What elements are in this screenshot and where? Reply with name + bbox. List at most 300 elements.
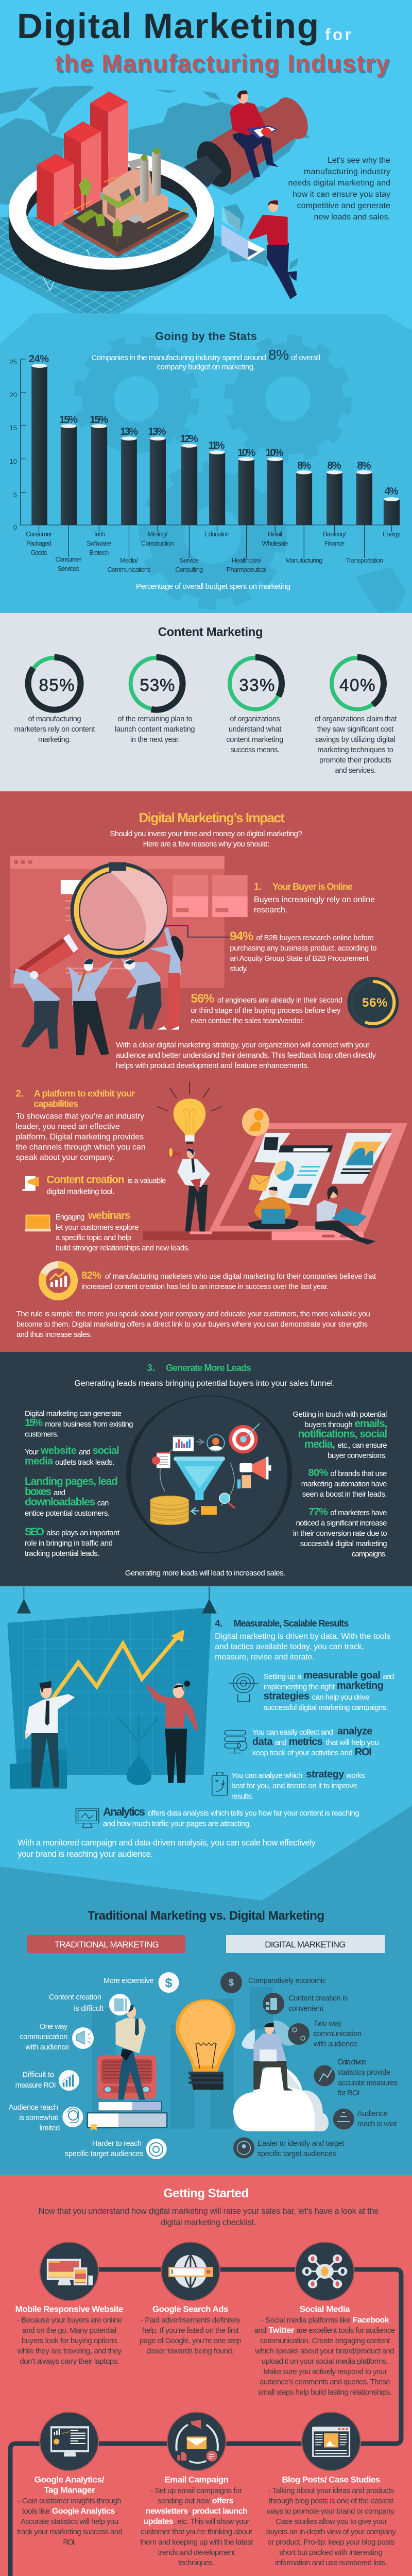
82 percent text and rule: and thus increase sales. [16, 1331, 92, 1339]
background gears [78, 340, 407, 613]
82 percent text and rule: become to them. Digital marketing offers a direct link to your buyers where you can demonstrate your strengths [16, 1320, 368, 1329]
checklist row 1: while they are traveling, and they [17, 2347, 122, 2355]
right column: notifications, social [298, 1428, 387, 1440]
left column: Your [25, 1448, 39, 1456]
traditional column labels: measure ROI [15, 2081, 56, 2090]
stats heading and captions: of overall [291, 353, 320, 362]
donut percentages: 53% [140, 675, 175, 694]
checklist row 2: sending out new [158, 2497, 210, 2505]
stats heading and captions [92, 330, 320, 591]
left column: and [79, 1448, 91, 1456]
bar chart: 20 [10, 391, 17, 399]
donut captions: promote their products [319, 756, 391, 765]
reason 1: Buyers increasingly rely on online [254, 895, 375, 904]
checklist row 2: offers [212, 2497, 234, 2505]
donut captions: marketing techniques to [317, 746, 393, 754]
bar chart: Finance [324, 539, 345, 547]
title: the Manufacturing Industry [55, 49, 389, 77]
bar chart: Manufacturing [285, 556, 322, 564]
bar chart: 15% [90, 414, 109, 426]
person 1 bending [13, 969, 60, 1049]
person 3 leaning [121, 959, 162, 1029]
reason 1: Your Buyer is Online [272, 882, 353, 892]
right column: Getting in touch with potential [293, 1410, 387, 1419]
checklist row 1: don’t always carry their laptops. [20, 2357, 119, 2366]
stats heading and captions: Percentage of overall budget spent on marketing [136, 582, 290, 591]
checklist row 1 [15, 2304, 395, 2397]
section 4 text: and [275, 1738, 287, 1747]
checklist row 1: closer towards being found. [146, 2347, 234, 2355]
bar chart: Service [180, 556, 199, 564]
reason 1 [191, 882, 376, 1025]
strategy clipboard icon [212, 1772, 227, 1795]
man [25, 1681, 75, 1787]
closing line: Generating more leads will lead to increased sales. [125, 1569, 285, 1578]
grid plate [0, 217, 229, 326]
checklist row 2: tools like [22, 2507, 50, 2516]
icon: mobile responsive devices [47, 2259, 93, 2285]
left column: and [54, 1488, 65, 1497]
digital column labels: Content creation is [288, 1994, 348, 2003]
reason 2: platform. Digital marketing provides [16, 1132, 144, 1142]
section 4 text: strategy [306, 1769, 345, 1780]
checklist row 1: help. If you’re listed on the first [142, 2326, 239, 2335]
panel: hero [0, 0, 412, 361]
intro [38, 2207, 379, 2227]
section 4 text: and [383, 1672, 394, 1681]
left column: boxes [25, 1486, 52, 1498]
right column: etc., can ensure [338, 1441, 387, 1450]
bar chart: Energy [383, 530, 401, 538]
digital column labels: Comparatively economic [248, 1977, 326, 1985]
bar chart: 10% [266, 447, 284, 459]
heading: Traditional Marketing vs. Digital Marketing [88, 1909, 324, 1923]
panel: going by the stats [0, 313, 412, 613]
checklist row 2: customer that you’re thinking about [141, 2528, 253, 2536]
checklist row 2: Case studies allow you to give your [276, 2517, 387, 2526]
section 4 text: 4. [215, 1618, 222, 1629]
checklist row 2: Google Analytics/ [35, 2475, 105, 2485]
donut captions: content marketing [226, 736, 283, 744]
bar chart: Wholesale [262, 539, 288, 547]
right column: in their conversion rate due to [293, 1529, 387, 1538]
panel: traditional vs digital marketing [0, 1806, 412, 2175]
section 4 text: implementing the right [264, 1683, 335, 1691]
82 percent text and rule [16, 1270, 376, 1339]
bar chart: 8% [357, 460, 371, 471]
left column: SEO [25, 1526, 44, 1538]
checklist row 1: and [254, 2326, 266, 2335]
bar chart [10, 353, 401, 573]
subheading: Generating leads means bringing potential buyers into your sales funnel. [74, 1379, 335, 1388]
section 4 text: keep track of your activities and [252, 1749, 353, 1757]
bar chart: 10% [237, 447, 255, 459]
reason 1: 1. [254, 882, 262, 892]
digital column labels: Two way [314, 2020, 342, 2028]
right column: noticed a significant increase [296, 1519, 387, 1528]
bar chart: Retail [268, 530, 282, 538]
left column: social [93, 1445, 119, 1456]
section 4 text: marketing [337, 1680, 384, 1691]
bar chart: 8% [297, 460, 312, 471]
woman [146, 1681, 198, 1783]
checklist row 1: Twitter [268, 2326, 294, 2335]
digital column labels: convenient [288, 2005, 323, 2013]
digital column labels: Audience [357, 2110, 388, 2118]
checklist row 2: updates [144, 2517, 174, 2526]
left column [25, 1410, 133, 1558]
section 4 text: Analytics [103, 1805, 145, 1818]
intro text: competitive and generate [297, 201, 390, 210]
bar chart: 13% [148, 426, 166, 437]
donut captions: of organizations claim that [315, 715, 397, 723]
checklist row 2: newsletters [146, 2507, 188, 2516]
digital column labels: Data driven [338, 2058, 367, 2066]
donut captions: in the next year. [130, 736, 180, 744]
bar chart: Communications [107, 566, 151, 573]
bar chart: 11% [208, 440, 225, 451]
checklist row 2: Accurate statistics will help you [21, 2517, 118, 2526]
left column: also plays an important [46, 1529, 120, 1537]
checklist row 2: - Talking about your ideas and products [268, 2486, 394, 2495]
bar chart: 5 [13, 491, 17, 499]
section 4 text: results. [231, 1792, 253, 1801]
digital column labels: for ROI [338, 2089, 359, 2097]
checklist row 1: Mobile Responsive Website [15, 2304, 124, 2314]
icon: blog post [312, 2427, 350, 2457]
donut percentages: 33% [239, 675, 274, 694]
right column: buyer conversions. [328, 1451, 387, 1460]
panel: content marketing [0, 613, 412, 791]
donut captions: they saw significant cost [317, 725, 393, 734]
bar chart: 4% [384, 486, 399, 497]
section 4 text: measurable goal [303, 1670, 381, 1681]
section 4 text: strategies [264, 1691, 310, 1702]
digital column icons [220, 1972, 354, 2159]
traditional column icons: $ [165, 1976, 173, 1990]
stats heading and captions: Companies in the manufacturing industry spend around [92, 353, 266, 362]
node circles [40, 2242, 360, 2576]
reason 2: digital marketing tool. [46, 1187, 114, 1196]
donut 82 percent [42, 1265, 74, 1297]
digital column labels: communication [314, 2030, 362, 2038]
section 4 text: can help you drive [312, 1693, 369, 1702]
panel: generate more leads [0, 1352, 412, 1586]
donut percentages [39, 675, 375, 694]
checklist row 2: buyers an in-depth view of your company [266, 2528, 396, 2536]
left column: role in bringing in traffic and [25, 1539, 113, 1548]
checklist row 2: Blog Posts/ Case Studies [282, 2475, 380, 2485]
reason 2: A platform to exhibit your [34, 1089, 135, 1099]
right column: media, [304, 1438, 335, 1450]
reason 2: Content creation [46, 1174, 125, 1186]
donut percentages: 85% [39, 675, 74, 694]
panel: getting started [0, 2175, 412, 2576]
checklist row 2: , etc. This will show your [174, 2517, 250, 2526]
left column: entice potential customers. [25, 1509, 110, 1518]
right column: 77% [308, 1506, 328, 1518]
cloud [233, 2065, 329, 2131]
seated woman [317, 1200, 338, 1222]
reason 2: let your customers explore [56, 1223, 139, 1232]
bar chart: Construction [141, 539, 174, 547]
traditional column icons [59, 1972, 179, 2159]
left column: customers. [25, 1430, 59, 1439]
bar chart: Transportation [346, 556, 383, 564]
checklist row 1: Make sure you actively respond to your [263, 2367, 387, 2376]
traditional column labels: communication [20, 2033, 67, 2041]
left column: website [40, 1445, 77, 1456]
title: for [325, 25, 351, 44]
donut captions: and services. [335, 767, 376, 775]
checklist row 2: Tag Manager [44, 2485, 95, 2495]
traditional column labels [9, 1977, 153, 2158]
reason 1: 56% [191, 992, 214, 1006]
illustration: presenter, light bulb and laptop [22, 1082, 407, 1245]
checklist row 2: , [188, 2507, 191, 2516]
reason 2: the channels through which you can [16, 1143, 146, 1152]
digital column labels: Easier to identify and target [258, 2140, 344, 2148]
reason 2: capabilities [33, 1098, 78, 1109]
traditional column labels: is difficult [74, 2005, 104, 2013]
section 4 text: offers data analysis which tells you how far your content is reaching [148, 1809, 359, 1818]
intro text: manufacturing industry [304, 167, 390, 176]
left column: tracking potential leads. [25, 1549, 99, 1558]
laptop [209, 1123, 407, 1231]
intro: digital marketing checklist. [161, 2218, 256, 2227]
left column: Landing pages, lead [25, 1476, 118, 1487]
reason 1: purchasing any business product, according to [230, 944, 376, 953]
section 4 text: that will help you [326, 1738, 379, 1747]
checklist row 2: - Gain customer insights through [18, 2497, 122, 2505]
checklist row 2: . [115, 2507, 118, 2516]
column header: traditional [27, 1935, 185, 1953]
icon: google search [168, 2255, 213, 2288]
checklist row 1: are excellent tools for audience [297, 2326, 395, 2335]
checklist row 2: Email Campaign [164, 2475, 229, 2485]
checklist row 2: or product. Pro-tip: keep your blog posts [267, 2538, 394, 2547]
checklist row 2: techniques. [178, 2558, 214, 2567]
left column: media [25, 1455, 54, 1467]
person with laptop [221, 200, 297, 299]
checklist row 1: page of Google, you’re one step [140, 2336, 241, 2345]
traditional column labels: specific target audiences [65, 2150, 144, 2158]
person on handle with tablet [230, 91, 279, 178]
checklist row 2: , [234, 2497, 236, 2505]
checklist connector [10, 2269, 401, 2576]
funnel illustration [126, 1396, 292, 1553]
heading: 3. [147, 1363, 155, 1373]
heading: Content Marketing [158, 625, 263, 639]
man on cloud [253, 2022, 293, 2091]
digital column labels: statistics provide [338, 2069, 390, 2077]
checklist row 1: upload it on your social media platforms. [262, 2357, 388, 2366]
donut captions: of organizations [230, 715, 280, 723]
section 4 text: successful digital marketing campaigns. [264, 1703, 388, 1712]
red bar chart columns [37, 92, 128, 227]
checklist row 2: trends and development [158, 2548, 235, 2557]
checklist row 2: through blog posts is one of the easiest [269, 2497, 394, 2505]
person 2 center [68, 959, 113, 1055]
world map [0, 86, 310, 270]
section 4 text: works [346, 1771, 365, 1780]
traditional column labels: limited [39, 2124, 60, 2132]
checklist row 2: Google Analytics [52, 2507, 115, 2516]
section 4 text: analyze [337, 1726, 372, 1737]
bar chart: Pharmaceutical [227, 566, 267, 573]
reason 2: build stronger relationships and new leads. [56, 1244, 190, 1252]
section 4 text: best for you, and iterate on it to improve [231, 1782, 357, 1790]
woman [150, 927, 183, 1029]
reason 1: of engineers are already in their second [217, 996, 342, 1005]
icon: email campaign [176, 2420, 218, 2463]
bar chart: Consumer [56, 555, 82, 563]
webinar icon [25, 1215, 50, 1230]
bar chart: 15% [59, 414, 78, 426]
donut captions: of the remaining plan to [118, 715, 193, 723]
checklist row 1: audience’s comments and queries. These [260, 2378, 390, 2386]
bar chart: Services [58, 565, 79, 572]
donut 56 percent [347, 977, 399, 1028]
right column: emails, [354, 1418, 387, 1430]
bar chart: Mining/ [147, 530, 168, 538]
reason 1: research. [254, 906, 287, 914]
section 4 text: With a monitored campaign and data-driven analysis, you can scale how effectively [18, 1838, 316, 1848]
connector line [164, 926, 229, 937]
traditional column labels: More expensive [104, 1977, 153, 1985]
intro: Now that you understand how digital marketing will raise your sales bar, let’s have a look at the [38, 2207, 379, 2216]
digital column icons: $ [229, 1977, 234, 1988]
right column: of marketers have [330, 1509, 387, 1517]
man on books [115, 2005, 146, 2100]
icon: analytics monitor [50, 2426, 89, 2456]
analytics monitor icon [76, 1808, 99, 1827]
bar chart: Software/ [87, 539, 112, 547]
digital column labels: specific target audiences [258, 2150, 336, 2158]
title [17, 6, 389, 77]
checklist row 1: which speaks about your brand/product and [254, 2347, 394, 2355]
donut 56 percent: 56% [362, 996, 387, 1010]
section 4 text: data [252, 1736, 273, 1748]
checklist row 2: track your marketing success and [17, 2528, 123, 2536]
donut captions: launch content marketing [115, 725, 195, 734]
bar chart: 12% [180, 433, 198, 445]
bar chart: Consulting [175, 566, 203, 573]
content creation icon [22, 1176, 36, 1191]
factory on platform [63, 148, 188, 257]
feedback loop text [116, 1041, 376, 1070]
presenter [185, 1185, 208, 1231]
bar chart: 13% [120, 426, 138, 437]
bar chart: 15 [10, 424, 17, 432]
reason 1: or third stage of the buying process before they [191, 1007, 341, 1015]
reason 2: is a valuable [127, 1177, 166, 1185]
checklist row 1: Facebook [353, 2316, 389, 2325]
reason 2: a specific topic and help [56, 1233, 131, 1242]
checklist row 2: them and keeping up with the latest [140, 2538, 253, 2547]
seated man [248, 1218, 298, 1229]
checklist row 1: Social Media [300, 2304, 350, 2314]
donut charts [28, 657, 384, 710]
checklist row 1: communication. Create engaging content [260, 2336, 390, 2345]
right column: buyers through [304, 1420, 353, 1429]
reason 2: leader, you need an effective [16, 1123, 120, 1131]
reason 2: speak about your company. [16, 1153, 114, 1162]
bar chart: Biotech [89, 549, 109, 556]
checklist row 2: product launch [192, 2507, 248, 2516]
traditional column labels: Difficult to [22, 2071, 54, 2079]
reason 1: of B2B buyers research online before [256, 934, 374, 942]
82 percent text and rule: of manufacturing marketers who use digital marketing for their companies believe that [105, 1273, 376, 1281]
section 4 text: . [372, 1749, 374, 1757]
feedback loop text: helps with product development and feature enhancements. [116, 1061, 309, 1070]
reason 1: 94% [230, 929, 253, 943]
donut captions: savings by utilizing digital [315, 736, 396, 744]
illustration: search magnifier and team [10, 856, 248, 1055]
bar chart: 24% [29, 353, 49, 365]
reason 2 [16, 1089, 190, 1252]
magnifier ring [9, 152, 214, 292]
magnifier handle [184, 94, 314, 191]
bar chart: Education [204, 530, 230, 538]
section 4 text: metrics [289, 1736, 322, 1748]
column header: traditional: TRADITIONAL MARKETING [55, 1940, 159, 1950]
section 4 text: You can analyze which [231, 1771, 302, 1780]
feedback loop text: audience and better understand their demands. This feedback loop often directly [116, 1051, 376, 1060]
bar chart: 25 [10, 358, 17, 366]
title: Digital Marketing [17, 6, 319, 46]
bar chart: Healthcare/ [232, 556, 262, 564]
heading: Digital Marketing’s Impact [139, 810, 285, 825]
checklist row 1: small steps help build lasting relationships. [258, 2388, 392, 2397]
intro [110, 829, 302, 849]
checklist row 1: - Social media platforms like [261, 2316, 350, 2325]
checklist row 1: Google Search Ads [152, 2304, 228, 2314]
icon: social media network [302, 2255, 347, 2289]
checklist row 2: ROI. [63, 2538, 76, 2547]
light bulb [176, 1999, 235, 2072]
digital column labels: reach is vast [357, 2120, 397, 2128]
reason 1: an Acquity Group State of B2B Procurement [230, 955, 369, 963]
right column: of brands that use [330, 1469, 387, 1478]
bar chart: Media/ [120, 556, 138, 564]
left column: can [97, 1499, 109, 1507]
section 4 text: ROI [355, 1747, 372, 1758]
reason 1: even contact the sales team/vendor. [191, 1017, 304, 1025]
section 4 text: Measurable, Scalable Results [234, 1618, 349, 1629]
column header: digital [226, 1935, 385, 1953]
traditional column labels: Audience reach [9, 2104, 58, 2112]
reason 2: webinars [88, 1210, 131, 1222]
traditional column labels: One way [40, 2023, 68, 2031]
donut percentages: 40% [339, 675, 375, 694]
heading: Getting Started [163, 2187, 249, 2200]
intro text: Let’s see why the [328, 156, 390, 165]
checklist row 1: - Paid advertisements definitely [141, 2316, 241, 2325]
bar chart: 10 [10, 457, 17, 465]
82 percent text and rule: 82% [81, 1270, 101, 1281]
left column: outlets track leads. [55, 1458, 114, 1467]
donut captions: understand what [229, 725, 281, 734]
section 4 text [18, 1618, 394, 1859]
envelope [248, 1175, 271, 1192]
bar chart: Tech [93, 530, 105, 538]
donut captions: of manufacturing [28, 715, 81, 723]
central illustration [87, 1987, 329, 2131]
hero illustration: world map, magnifier and factory [0, 86, 314, 326]
digital column labels [248, 1977, 398, 2158]
traditional column labels: Content creation [49, 1993, 101, 2002]
